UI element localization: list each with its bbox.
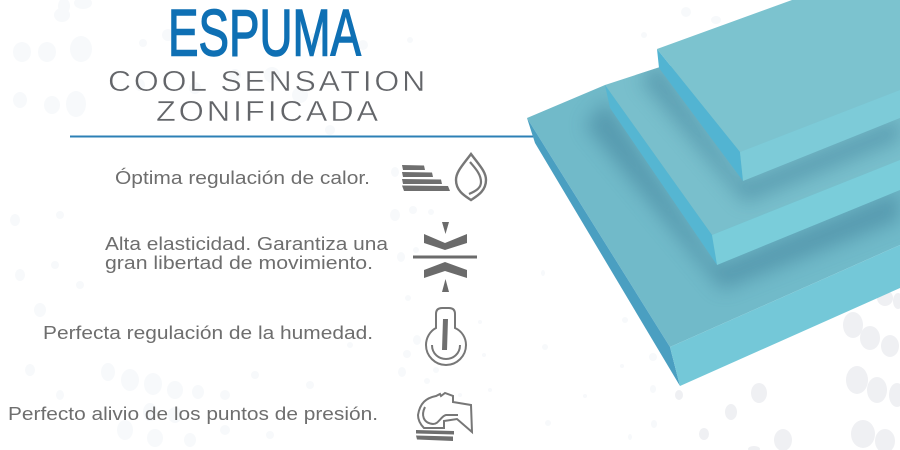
bottom slab xyxy=(527,60,900,386)
icon: layers and drop xyxy=(402,154,486,200)
middle slab xyxy=(605,66,900,265)
feature text: heat regulation: Óptima regulación de calor. xyxy=(115,167,370,188)
feature text: elasticity: gran libertad de movimiento. xyxy=(105,253,373,273)
icon: head on pillow xyxy=(416,393,472,441)
subtitle: ZONIFICADA xyxy=(156,96,381,128)
icon: compression arrows xyxy=(413,222,477,292)
foam slabs xyxy=(527,0,900,386)
blue divider line xyxy=(70,136,536,138)
feature text: humidity: Perfecta regulación de la humedad. xyxy=(43,323,373,343)
top slab xyxy=(657,0,900,181)
subtitle: COOL SENSATION xyxy=(108,66,428,98)
subtitle xyxy=(108,66,428,128)
feature text: pressure relief: Perfecto alivio de los puntos de presión. xyxy=(8,404,378,424)
icon: thermometer xyxy=(426,308,466,365)
feature text: elasticity xyxy=(105,234,389,273)
feature text: elasticity: Alta elasticidad. Garantiza una xyxy=(105,234,389,254)
